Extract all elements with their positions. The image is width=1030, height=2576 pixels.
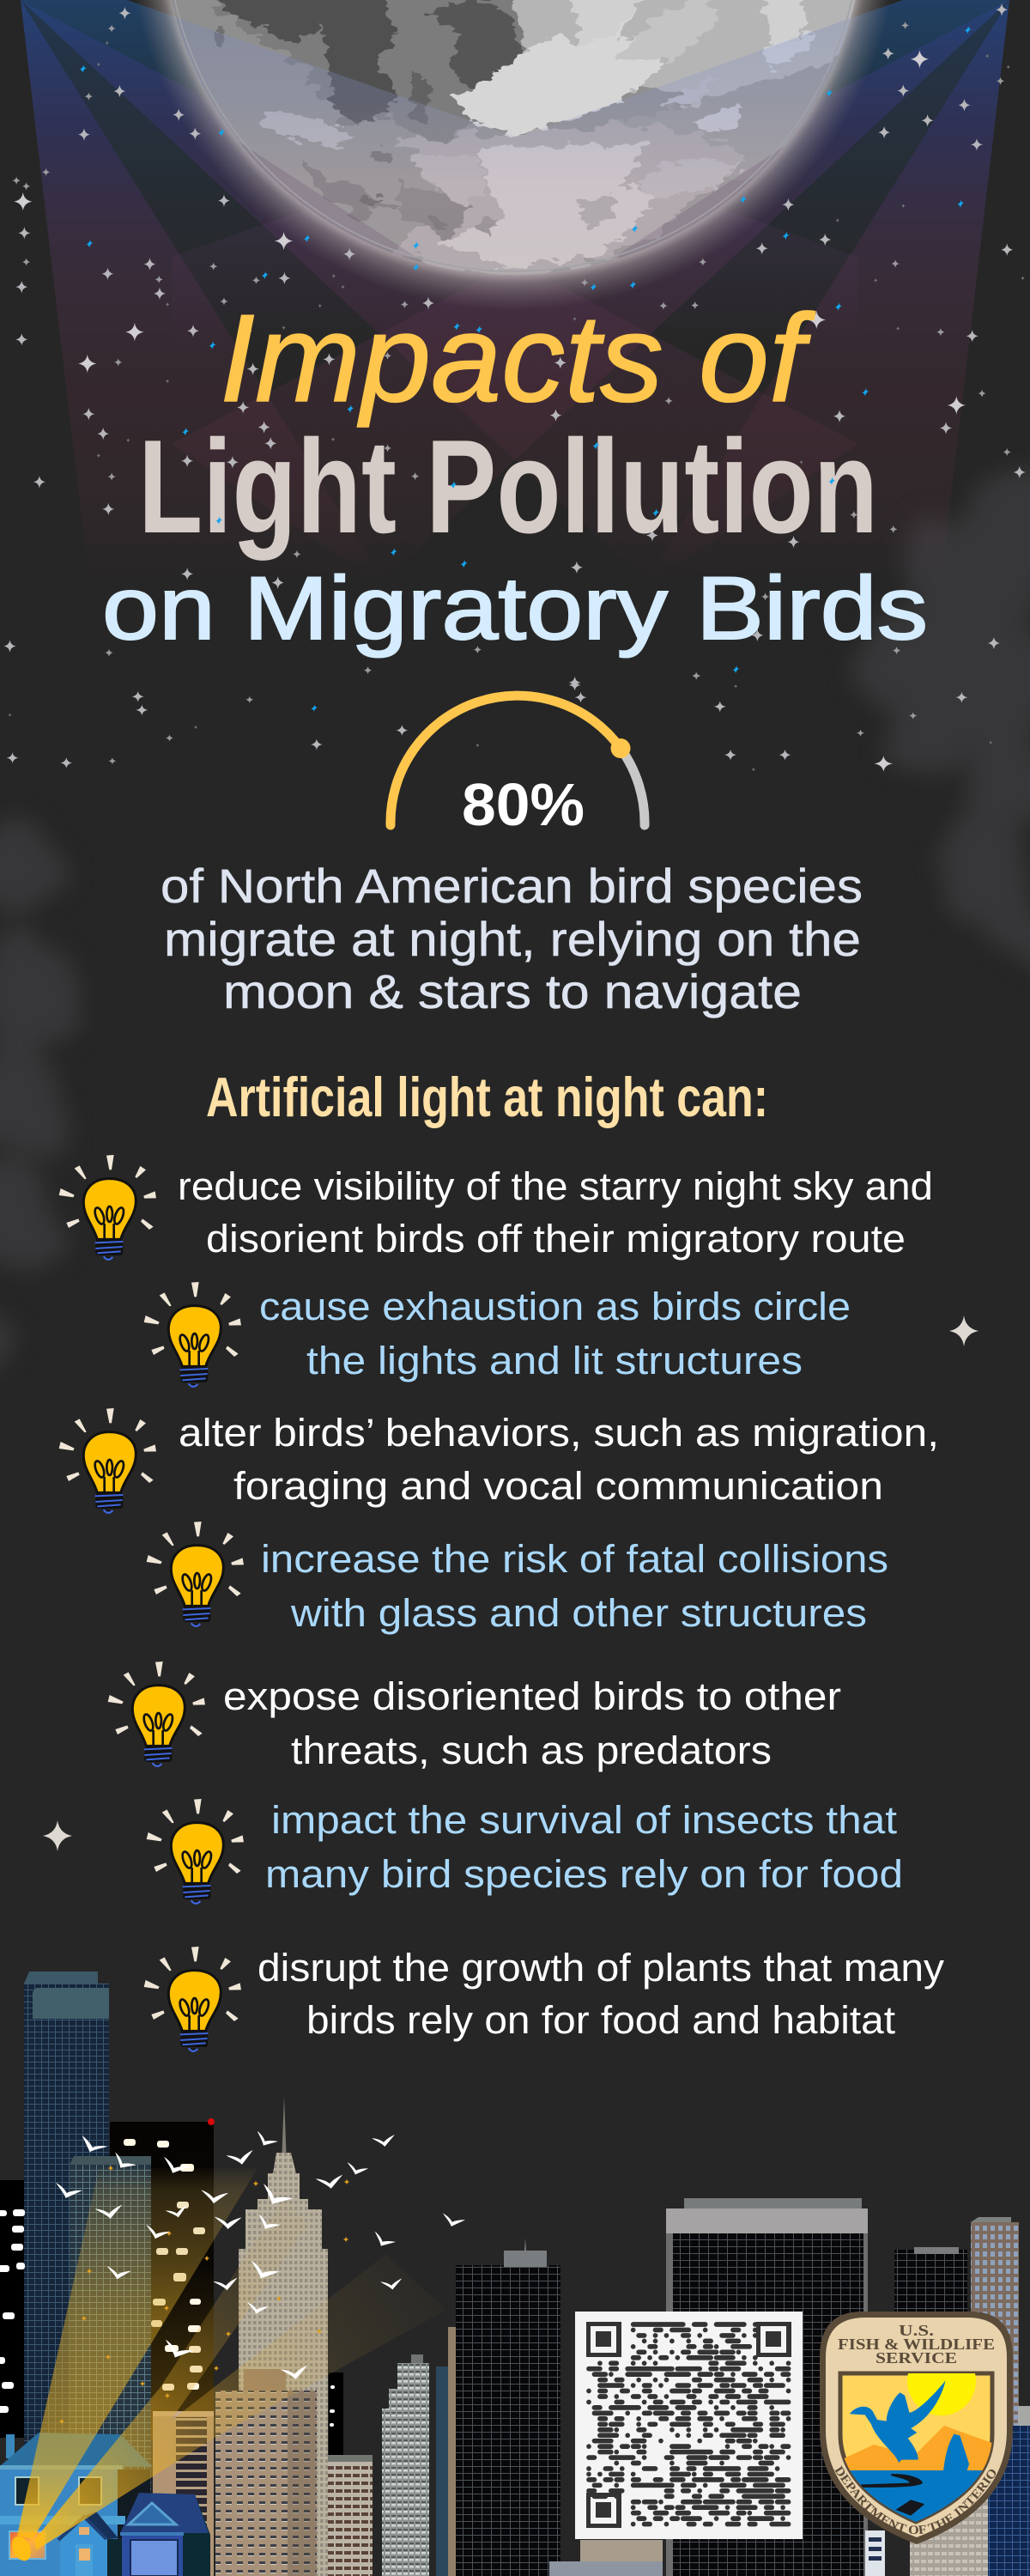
fish [943,2433,970,2470]
channel [856,2474,923,2488]
brown apartment building [215,2369,317,2576]
item text [223,1674,841,1772]
big blue house [0,2433,153,2576]
badge heading: FISH & WILDLIFE [838,2336,995,2353]
black building with lit windows [110,2118,215,2439]
US Fish and Wildlife Service badge [820,2312,1013,2544]
low tan building [549,2540,663,2576]
moon beam tint [176,17,851,274]
dark skyscraper [456,2238,560,2576]
badge band text: DEPARTMENT OF THE INTERIOR [834,2465,996,2535]
list item 4 [147,1522,888,1635]
statistic description: of North American bird species [161,859,863,913]
small black tower [329,2372,343,2455]
list item 3 [59,1408,939,1513]
statistic description: migrate at night, relying on the [164,912,861,966]
moon broad tones [201,0,890,283]
moon lavender shade [239,142,785,264]
list item 2 [144,1282,851,1387]
brick building [328,2455,373,2576]
list item 5 [108,1662,841,1772]
house lamp light beams [17,2168,446,2550]
grey stepped tower [382,2354,429,2576]
duck [850,2380,946,2463]
title line: Impacts of: Impacts of [220,289,815,428]
icon: light bulb [147,1799,244,1904]
teal glass tower [70,2156,151,2491]
item text: cause exhaustion as birds circle [259,1285,851,1328]
80 percent gauge: 80% [462,771,585,838]
red beacon [208,2118,215,2125]
right dark tower [894,2247,967,2507]
beige tower [865,2482,988,2576]
stars upper sky [4,3,1026,689]
icon: light bulb [147,1522,244,1626]
icon: light bulb [59,1155,156,1260]
item text: impact the survival of insects that [271,1798,898,1842]
icon: light bulb [144,1282,241,1387]
item text [265,1798,903,1896]
item text: alter birds’ behaviors, such as migration, [179,1411,939,1455]
navy tower [988,2406,1030,2576]
list item 7 [144,1946,945,2051]
heading: artificial light: Artificial light at night can: [206,1066,768,1128]
QR modules [589,2324,789,2524]
small blue house [58,2512,124,2576]
item text: the lights and lit structures [306,1339,803,1382]
item text: threats, such as predators [291,1728,772,1772]
icon: light bulb [59,1408,156,1513]
item text: birds rely on for food and habitat [306,1998,896,2042]
QR finder patterns [586,2322,791,2528]
item text [179,1411,939,1508]
80 percent gauge [391,696,645,838]
item text: reduce visibility of the starry night sky and [178,1164,933,1208]
spotlight beams [21,0,1009,584]
badge heading: U.S. [899,2322,934,2339]
list item 1 [59,1155,933,1261]
badge scene [838,2372,994,2524]
splash [895,2500,924,2516]
art deco skyscraper [239,2097,328,2576]
item text: expose disoriented birds to other [223,1674,841,1718]
badge heading: SERVICE [876,2349,957,2366]
item text [259,1285,851,1382]
moon [139,0,888,306]
item text [261,1537,888,1635]
QR code [575,2312,803,2539]
icon: light bulb [108,1662,205,1766]
list item 6 [147,1798,903,1904]
title overlay blue stars [215,441,835,673]
item text [258,1946,945,2042]
item text: disorient birds off their migratory route [206,1217,906,1261]
dark blue house [120,2493,210,2576]
blue glass tower [24,1971,109,2464]
brown tower with blue windows [971,2217,1019,2480]
small gold sparks [58,2166,350,2425]
title [102,289,928,659]
title line: on Migratory Birds: on Migratory Birds [102,559,928,659]
item text: foraging and vocal communication [233,1464,883,1508]
house lamp [9,2533,34,2564]
migrating birds [52,2129,465,2380]
large black tower [666,2198,868,2576]
item text: many bird species rely on for food [265,1852,903,1896]
item text: increase the risk of fatal collisions [261,1537,888,1581]
statistic description: moon & stars to navigate [223,964,802,1018]
badge heading [838,2322,995,2366]
brown office building [153,2411,214,2576]
houses [0,2433,210,2576]
item text: with glass and other structures [290,1591,867,1635]
clouds [0,464,1030,1365]
icon: light bulb [144,1947,241,2051]
statistic description [161,859,863,1018]
moon fine detail [215,0,816,269]
stars lower sky [7,672,992,772]
sparkle left [43,1820,72,1851]
item text: disrupt the growth of plants that many [258,1946,945,1990]
city skyline [0,1971,1030,2576]
slim blue and beige towers [436,2327,456,2576]
item text [178,1164,933,1261]
sparkle right [949,1315,978,1346]
left black building [0,2180,25,2438]
